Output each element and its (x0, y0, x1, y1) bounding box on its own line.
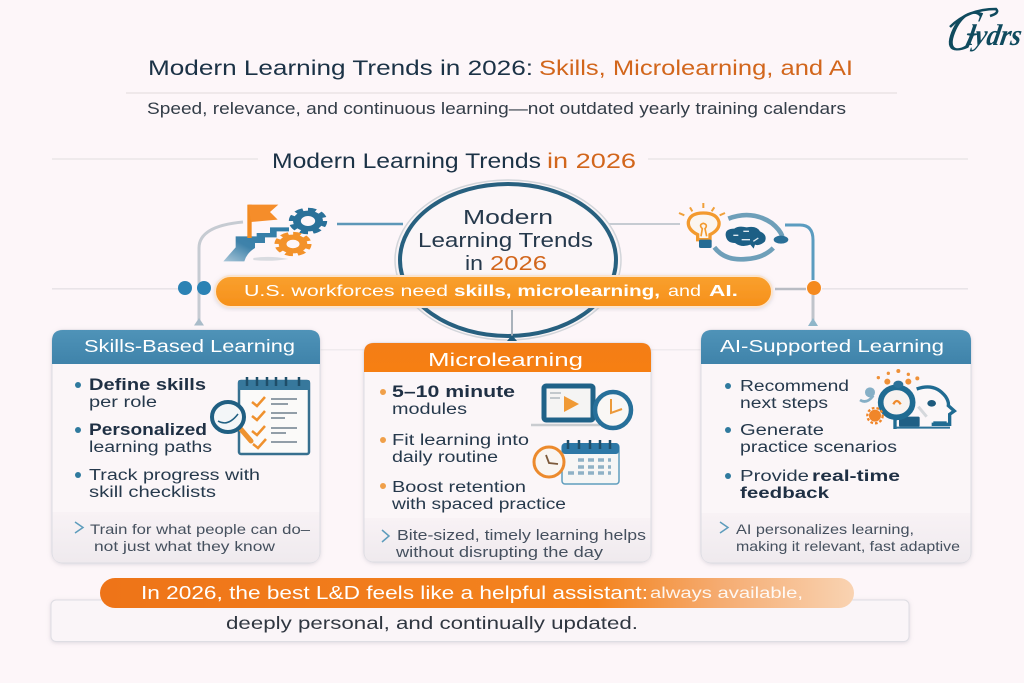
title: Skills, Microlearning, and AI (539, 57, 853, 80)
takeaway (720, 521, 960, 554)
bullet list: 5–10 minute (392, 382, 515, 401)
central circle: in (465, 252, 483, 275)
closing statement banner: always available, (650, 585, 803, 602)
takeaway: without disrupting the day (395, 545, 604, 561)
decorative blue dots: left (178, 281, 211, 295)
logo: G (939, 0, 990, 63)
section heading: in 2026 (547, 150, 636, 173)
closing statement box (51, 600, 909, 642)
panel footer (702, 513, 970, 562)
panel: microlearning (364, 343, 651, 562)
bullet list (75, 376, 260, 501)
bullet list: next steps (740, 395, 828, 412)
banner: key message: U.S. workforces need (244, 283, 448, 300)
takeaway: Bite-sized, timely learning helps (397, 528, 646, 544)
connector: left branch (194, 222, 403, 326)
takeaway: Train for what people can do– (90, 521, 310, 537)
banner: key message: skills, microlearning, (454, 283, 660, 300)
bullet list: Generate (740, 422, 824, 439)
takeaway: making it relevant, fast adaptive (736, 538, 960, 554)
bullet list: daily routine (392, 449, 498, 466)
panel heading: Microlearning (428, 350, 583, 370)
closing statement banner (100, 578, 854, 608)
title: Modern Learning Trends in 2026: (148, 57, 533, 80)
panel header (364, 343, 651, 372)
central circle: Modern (463, 206, 553, 229)
bullet list: practice scenarios (740, 439, 897, 456)
central circle: 2026 (490, 252, 547, 275)
bullet list: skill checklists (89, 484, 216, 501)
icon: laptop and clock (531, 386, 631, 428)
banner: key message: AI. (709, 283, 738, 300)
bullet list: per role (89, 394, 157, 411)
connector: center to microlearning (507, 310, 517, 341)
connector: right branch (605, 224, 818, 326)
takeaway (382, 528, 646, 561)
subtitle: Speed, relevance, and continuous learning—not outdated yearly training calendars (147, 100, 846, 118)
panel: ai-supported learning (701, 330, 971, 563)
icon: checklist with magnifier (212, 377, 310, 454)
bullet list: feedback (740, 485, 829, 502)
bullet list: Track progress with (89, 467, 260, 484)
icon: AI head (860, 369, 954, 429)
bullet list (380, 382, 566, 513)
bullet list: modules (392, 401, 467, 418)
banner: key message (215, 276, 772, 307)
takeaway: not just what they know (94, 538, 276, 554)
banner: key message: and (668, 283, 701, 300)
closing statement banner: In 2026, the best L&D feels like a helpful assistant: (141, 583, 648, 603)
icon: calendar and clock (534, 440, 619, 484)
bullet list: Boost retention (392, 479, 526, 496)
closing statement box: deeply personal, and continually updated. (226, 613, 638, 633)
section heading: Modern Learning Trends (272, 150, 541, 173)
bullet list: with spaced practice (391, 496, 566, 513)
bullet list: learning paths (89, 439, 212, 456)
panel header (701, 330, 971, 364)
panel: skills-based learning (52, 330, 320, 563)
takeaway (75, 521, 310, 554)
bullet list: Provide (740, 468, 809, 485)
panel footer (52, 512, 320, 562)
bullet list: Recommend (740, 378, 849, 395)
panel heading: Skills-Based Learning (84, 336, 295, 356)
icon: lightbulb and brain (679, 203, 788, 259)
title (148, 57, 853, 80)
panel header (52, 330, 320, 364)
bullet list (725, 378, 900, 502)
bullet list: Fit learning into (392, 432, 529, 449)
bullet list: Personalized (89, 421, 207, 439)
central circle: Learning Trends (418, 229, 593, 252)
takeaway: AI personalizes learning, (736, 521, 914, 537)
orange dot: right (807, 281, 821, 295)
panel heading: AI-Supported Learning (720, 336, 944, 356)
icon: flag, stairs and gears (223, 205, 324, 261)
central circle (395, 180, 621, 340)
bullet list: Define skills (89, 376, 206, 394)
panel footer (364, 518, 650, 562)
section heading (272, 150, 636, 173)
bullet list: real-time (812, 468, 900, 485)
